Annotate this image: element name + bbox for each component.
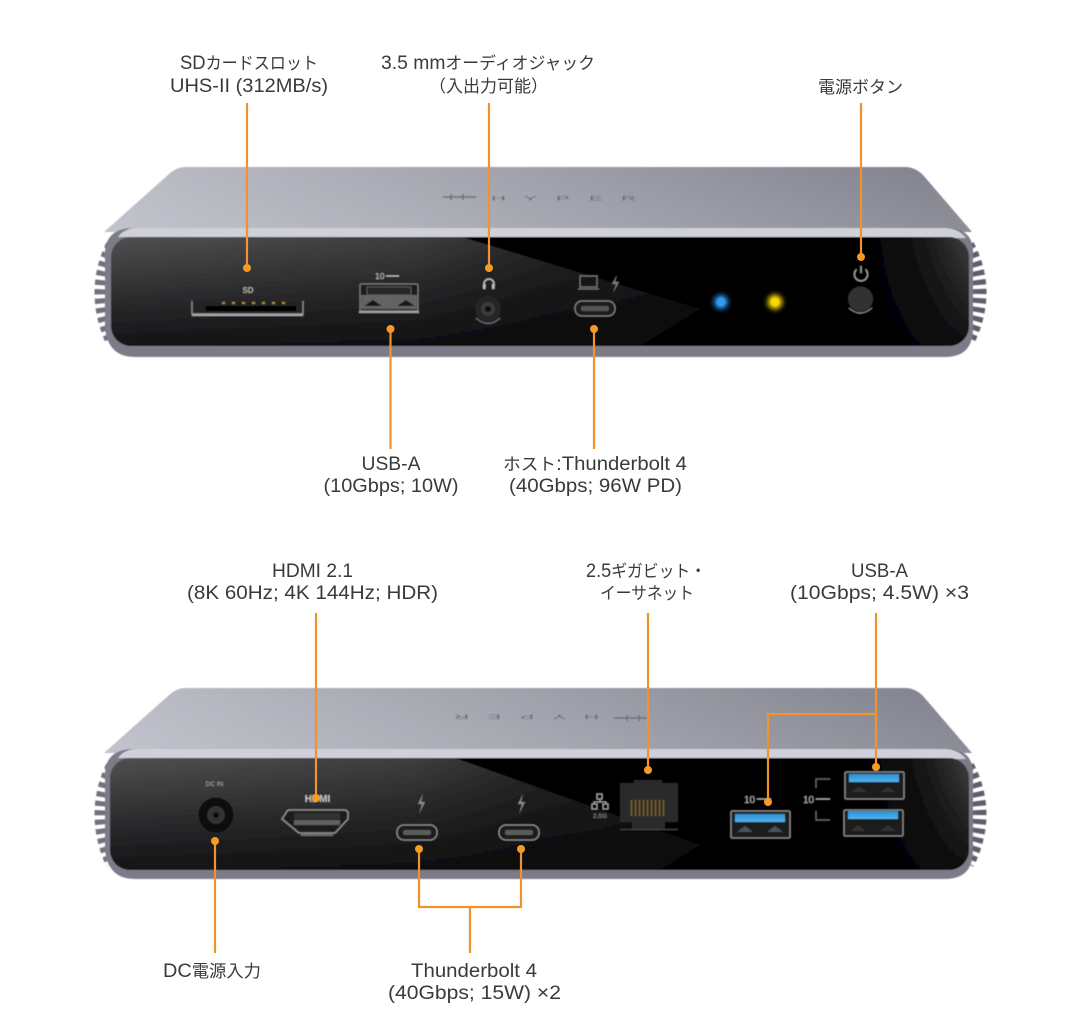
- callout: power button: [818, 78, 903, 261]
- top face highlight: [104, 688, 972, 753]
- callout: USB-A front: [324, 325, 458, 497]
- USB-A port: [359, 271, 419, 312]
- top face of the dock: [104, 688, 972, 753]
- callout: USB-A front: (10Gbps; 10W): [324, 475, 458, 497]
- black reflection wedge: [455, 758, 969, 870]
- callout: DC power input: DC電源入力: [163, 960, 261, 982]
- Ethernet port: 2.5G: [593, 813, 607, 820]
- HDMI port: [282, 794, 348, 835]
- callout: USB-A rear x3: (10Gbps; 4.5W) ×3: [790, 582, 969, 604]
- callout: Thunderbolt 4 rear x2: (40Gbps; 15W) ×2: [388, 982, 561, 1004]
- silver body frame: [105, 228, 973, 357]
- callout: HDMI: (8K 60Hz; 4K 144Hz; HDR): [187, 582, 438, 604]
- callout: DC power input: [163, 837, 261, 982]
- device: rear view of dock: [103, 688, 978, 879]
- device: front view of dock: [103, 167, 978, 357]
- front glass panel: [111, 237, 969, 346]
- left vent fins: [103, 767, 114, 863]
- USB-A port, single blue: [731, 795, 790, 838]
- status LED: blue: [714, 295, 728, 309]
- SD card slot: SD: [242, 286, 254, 295]
- silver body frame: [105, 749, 973, 879]
- callout: HDMI: HDMI 2.1: [272, 560, 353, 582]
- black reflection wedge: [462, 237, 969, 346]
- Thunderbolt 4 port 2: [499, 794, 539, 840]
- SD card slot: [192, 286, 303, 315]
- left vent fins: [103, 246, 114, 341]
- top face of the dock: [104, 167, 972, 232]
- panel shading: [111, 237, 969, 346]
- USB-A port, single blue: 10: [744, 795, 756, 806]
- DC input jack: [198, 781, 234, 832]
- USB-A port, upper blue: [845, 772, 904, 799]
- audio jack with headphone icon: [475, 279, 501, 324]
- callout: HDMI: [187, 560, 438, 802]
- callout: host Thunderbolt 4: ホスト:Thunderbolt 4: [503, 453, 687, 475]
- HDMI port: HDMI: [305, 794, 330, 805]
- right vent fins: [966, 767, 978, 863]
- callout: audio jack: （入出力可能）: [429, 72, 548, 97]
- top face highlight: [104, 167, 972, 232]
- callout: USB-A rear x3: USB-A: [851, 560, 908, 582]
- status LED: yellow: [768, 294, 782, 310]
- callout: host Thunderbolt 4: [503, 325, 687, 497]
- callout: SD card slot: SDカードスロット: [180, 52, 318, 74]
- power button: [848, 266, 873, 313]
- callout: Ethernet: [586, 560, 706, 774]
- Ethernet port: [592, 780, 678, 830]
- right vent fins: [966, 246, 978, 341]
- callout: Ethernet: イーサネット: [600, 584, 694, 603]
- inverted HYPER logo on top: HYPER: [454, 713, 599, 720]
- panel shading: [110, 758, 969, 870]
- USB-A port: 10: [375, 271, 385, 281]
- callout: Thunderbolt 4 rear x2: Thunderbolt 4: [411, 960, 537, 982]
- callout: power button: 電源ボタン: [818, 78, 903, 97]
- callout: host Thunderbolt 4: (40Gbps; 96W PD): [509, 475, 682, 497]
- callout: Ethernet: 2.5ギガビット・: [586, 560, 706, 582]
- USB-A port, lower blue: [844, 810, 903, 836]
- callout: SD card slot: UHS-II (312MB/s): [170, 75, 328, 97]
- callout: audio jack: [381, 52, 595, 272]
- Thunderbolt 4 port 1: [397, 794, 437, 840]
- inverted HYPER logo on top: [454, 713, 647, 721]
- USB-A label bracket: [803, 779, 830, 820]
- HYPER logo on top: HYPER: [491, 195, 636, 202]
- front glass panel: [110, 758, 969, 870]
- DC input jack: DC IN: [206, 781, 224, 788]
- callout: audio jack: 3.5 mmオーディオジャック: [381, 52, 595, 74]
- callout: USB-A rear x3: [764, 560, 969, 806]
- host Thunderbolt 4 port with laptop and bolt icons: [575, 275, 619, 316]
- USB-A label bracket: 10: [803, 795, 815, 806]
- callout: SD card slot: [170, 52, 328, 272]
- HYPER logo on top: [443, 194, 636, 202]
- callout: USB-A front: USB-A: [362, 453, 420, 475]
- silver top strip: [118, 749, 966, 759]
- silver top strip: [118, 228, 966, 238]
- callout: Thunderbolt 4 rear x2: [388, 845, 561, 1004]
